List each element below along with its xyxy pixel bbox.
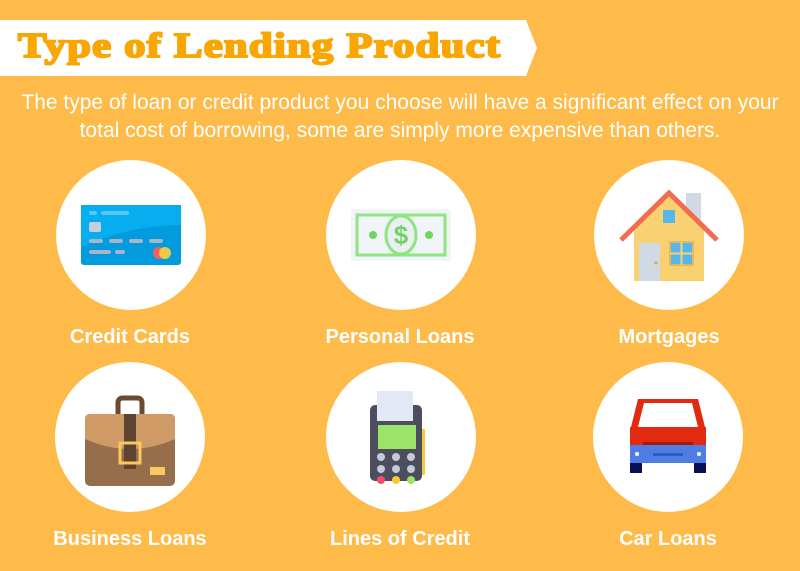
- subtitle: total cost of borrowing, some are simply more expensive than others.: [80, 119, 720, 142]
- item: mortgages: [594, 160, 744, 310]
- icon: house: [621, 193, 717, 281]
- icon: credit card: [81, 205, 181, 265]
- subtitle: The type of loan or credit product you choose will have a significant effect on your: [21, 91, 779, 114]
- icon: card terminal: [370, 391, 425, 484]
- label: car loans: Car Loans: [619, 528, 717, 550]
- item: personal loans: [326, 160, 476, 310]
- label: personal loans: Personal Loans: [326, 326, 474, 348]
- subtitle: [21, 91, 779, 142]
- icon: banknote: $: [394, 220, 409, 250]
- icon: briefcase: [85, 398, 175, 486]
- item: lines of credit: [326, 362, 476, 512]
- title: Type of Lending Product: [18, 26, 501, 65]
- label: lines of credit: Lines of Credit: [330, 528, 470, 550]
- item: business loans: [55, 362, 205, 512]
- label: credit cards: Credit Cards: [70, 326, 190, 348]
- icon: car: [630, 399, 706, 473]
- label: business loans: Business Loans: [53, 528, 207, 550]
- item: credit cards: [56, 160, 206, 310]
- banner: [0, 20, 537, 76]
- label: mortgages: Mortgages: [618, 326, 720, 348]
- item: car loans: [593, 362, 743, 512]
